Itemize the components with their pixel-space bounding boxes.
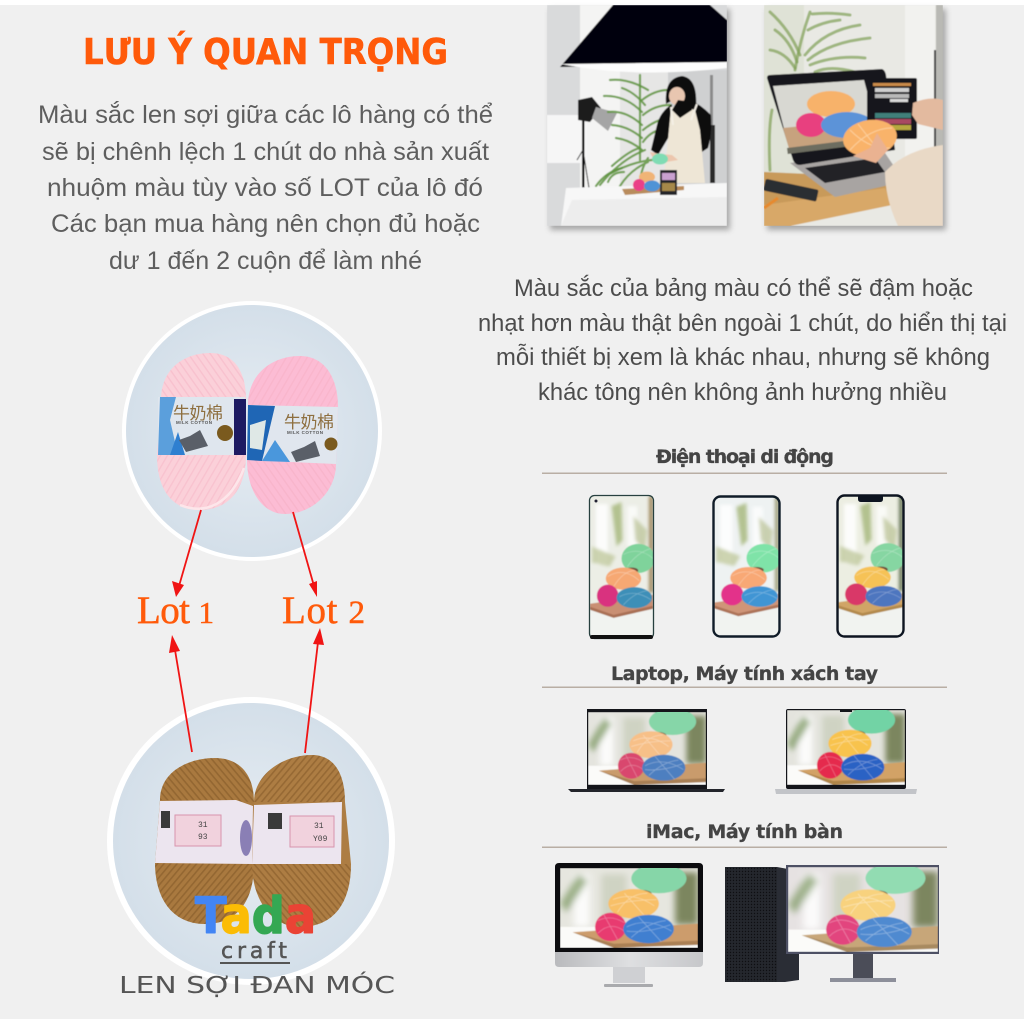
photo: laptop with colour chart and yarn (763, 5, 946, 230)
desktop tower and monitor (725, 863, 939, 982)
text block: screen colour note: Màu sắc của bảng màu có thể sẽ đậm hoặc (514, 275, 973, 302)
text block: screen colour note: mỗi thiết bị xem là khác nhau, nhưng sẽ không (496, 344, 990, 371)
yarn ball: Lot 2 pink (247, 356, 338, 514)
label: Lot 1: Lot 1 (137, 589, 214, 632)
text block: lot colour note: Các bạn mua hàng nên chọn đủ hoặc (51, 210, 480, 238)
text block: lot colour note: dư 1 đến 2 cuộn để làm nhé (109, 247, 422, 275)
phone 3 (838, 496, 905, 636)
text block: lot colour note: nhuộm màu tùy vào số LOT của lô đó (47, 174, 483, 202)
arrow: pink Lot 1 yarn to label (172, 510, 201, 597)
laptop 1 (568, 708, 725, 792)
photo: pink yarn circle (Lot 1 and Lot 2) (122, 301, 382, 561)
yarn ball: brown left (155, 758, 254, 924)
yarn ball: Lot 2 pink: 牛奶棉 (284, 408, 334, 433)
laptop 2 (775, 706, 917, 794)
arrow: brown right yarn to Lot 2 (305, 628, 324, 753)
text block: screen colour note: nhạt hơn màu thật bên ngoài 1 chút, do hiển thị tại (478, 310, 1007, 337)
phone 1 (590, 496, 655, 639)
logo: Tada craft: craft (221, 939, 287, 964)
text block: lot colour note: sẽ bị chênh lệch 1 chút do nhà sản xuất (42, 138, 489, 166)
logo: Tada craft: Tada (195, 887, 316, 945)
yarn ball: brown left: 31 (198, 821, 208, 830)
yarn ball: brown right: 31 (314, 822, 324, 831)
title: LƯU Ý QUAN TRỌNG (83, 30, 448, 73)
label: Lot 2: Lot 2 (282, 589, 365, 632)
heading: laptops: Laptop, Máy tính xách tay (611, 663, 879, 685)
text block: lot colour note: Màu sắc len sợi giữa các lô hàng có thể (38, 100, 493, 129)
yarn ball: brown right: Y09 (313, 835, 328, 844)
yarn ball: brown right (252, 755, 351, 927)
yarn ball: Lot 2 pink: MILK COTTON (287, 430, 323, 435)
logo: Tada craft (119, 887, 395, 999)
yarn ball: brown left: 93 (198, 833, 208, 842)
photo: brown yarn circle (107, 697, 395, 985)
text block: screen colour note: khác tông nên không ảnh hưởng nhiều (538, 379, 947, 406)
text block: screen colour note (478, 275, 1007, 406)
photo: studio scene with woman and yarn (547, 5, 730, 230)
logo: Tada craft: LEN SỢI ĐAN MÓC (119, 971, 395, 999)
heading: desktops: iMac, Máy tính bàn (646, 821, 843, 843)
phone 2 (714, 496, 781, 636)
arrow: pink Lot 2 yarn to label (293, 512, 317, 597)
iMac (555, 863, 703, 987)
yarn ball: Lot 1 pink: 牛奶棉 (173, 399, 223, 424)
arrow: brown left yarn to Lot 1 (169, 635, 192, 752)
yarn ball: Lot 1 pink: MILK COTTON (176, 420, 212, 425)
text block: lot colour note (38, 100, 493, 275)
heading: phones: Điện thoại di động (656, 446, 834, 468)
yarn ball: Lot 1 pink (157, 353, 246, 510)
